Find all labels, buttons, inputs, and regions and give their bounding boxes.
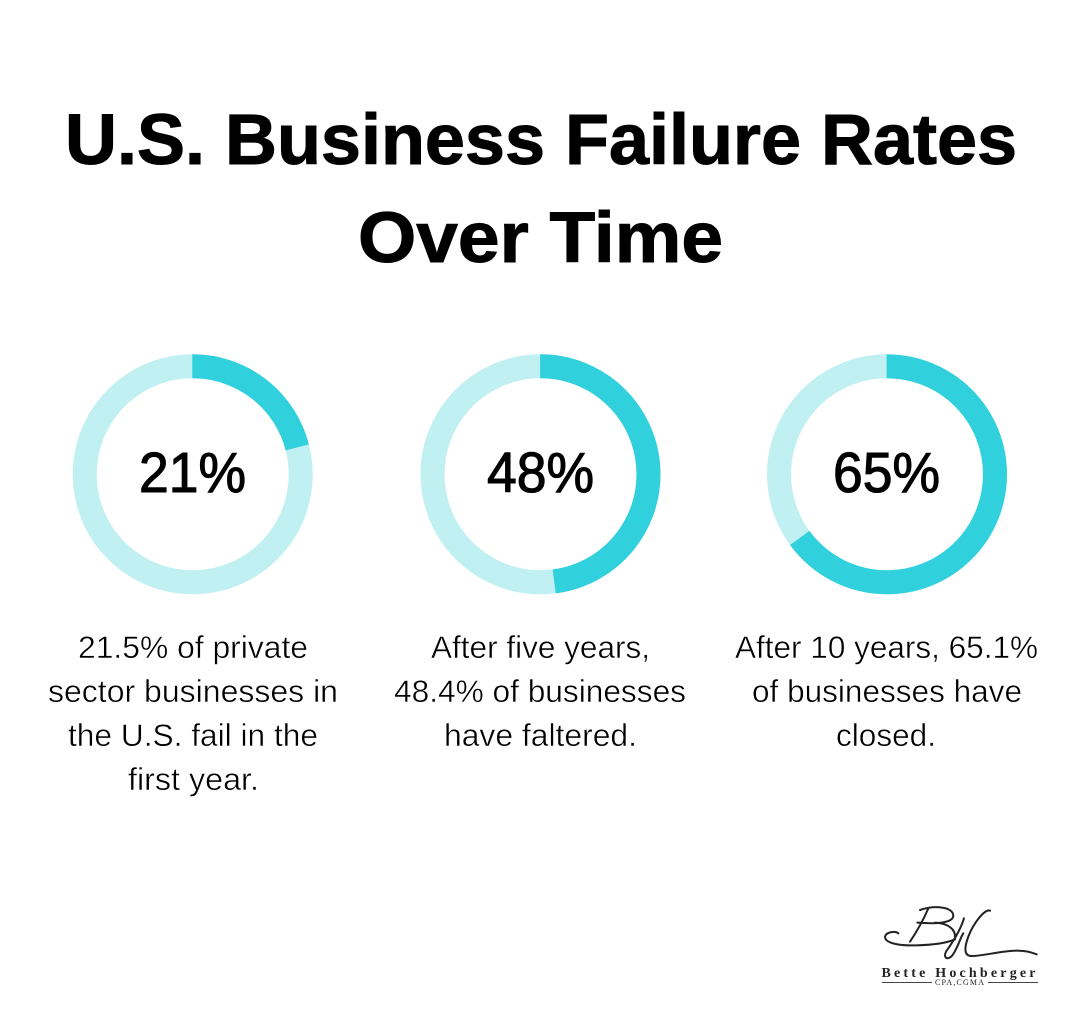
description: ten years (735, 629, 1038, 753)
description: first year: sector businesses in (48, 673, 338, 709)
stat: 65%: 65% (833, 441, 940, 505)
logo: Bette Hochberger (882, 907, 1038, 987)
panel: five years (394, 366, 686, 753)
logo credentials: CPA,CGMA (935, 978, 984, 987)
title: Over Time (358, 199, 723, 278)
title: U.S. Business Failure Rates (65, 101, 1017, 180)
description: first year: the U.S. fail in the (68, 717, 318, 753)
donut chart: 48% (432, 366, 648, 582)
donut chart: 21% (85, 366, 301, 582)
description: first year: first year. (128, 761, 259, 797)
description: first year (48, 629, 338, 797)
description: five years (394, 629, 686, 753)
panel: first year (48, 366, 338, 797)
stat: 48%: 48% (487, 441, 594, 505)
description: five years: 48.4% of businesses (394, 673, 686, 709)
description: first year: 21.5% of private (78, 629, 308, 665)
title (65, 101, 1017, 278)
description: five years: After five years, (431, 629, 650, 665)
description: ten years: of businesses have (752, 673, 1022, 709)
icon: BH signature (885, 907, 1037, 958)
logo name: Bette Hochberger (882, 966, 1036, 981)
donut chart: 65% (779, 366, 995, 582)
description: five years: have faltered. (444, 717, 637, 753)
panel: ten years (735, 366, 1038, 753)
stat: 21%: 21% (139, 441, 246, 505)
description: ten years: closed. (836, 717, 936, 753)
description: ten years: After 10 years, 65.1% (735, 629, 1038, 665)
